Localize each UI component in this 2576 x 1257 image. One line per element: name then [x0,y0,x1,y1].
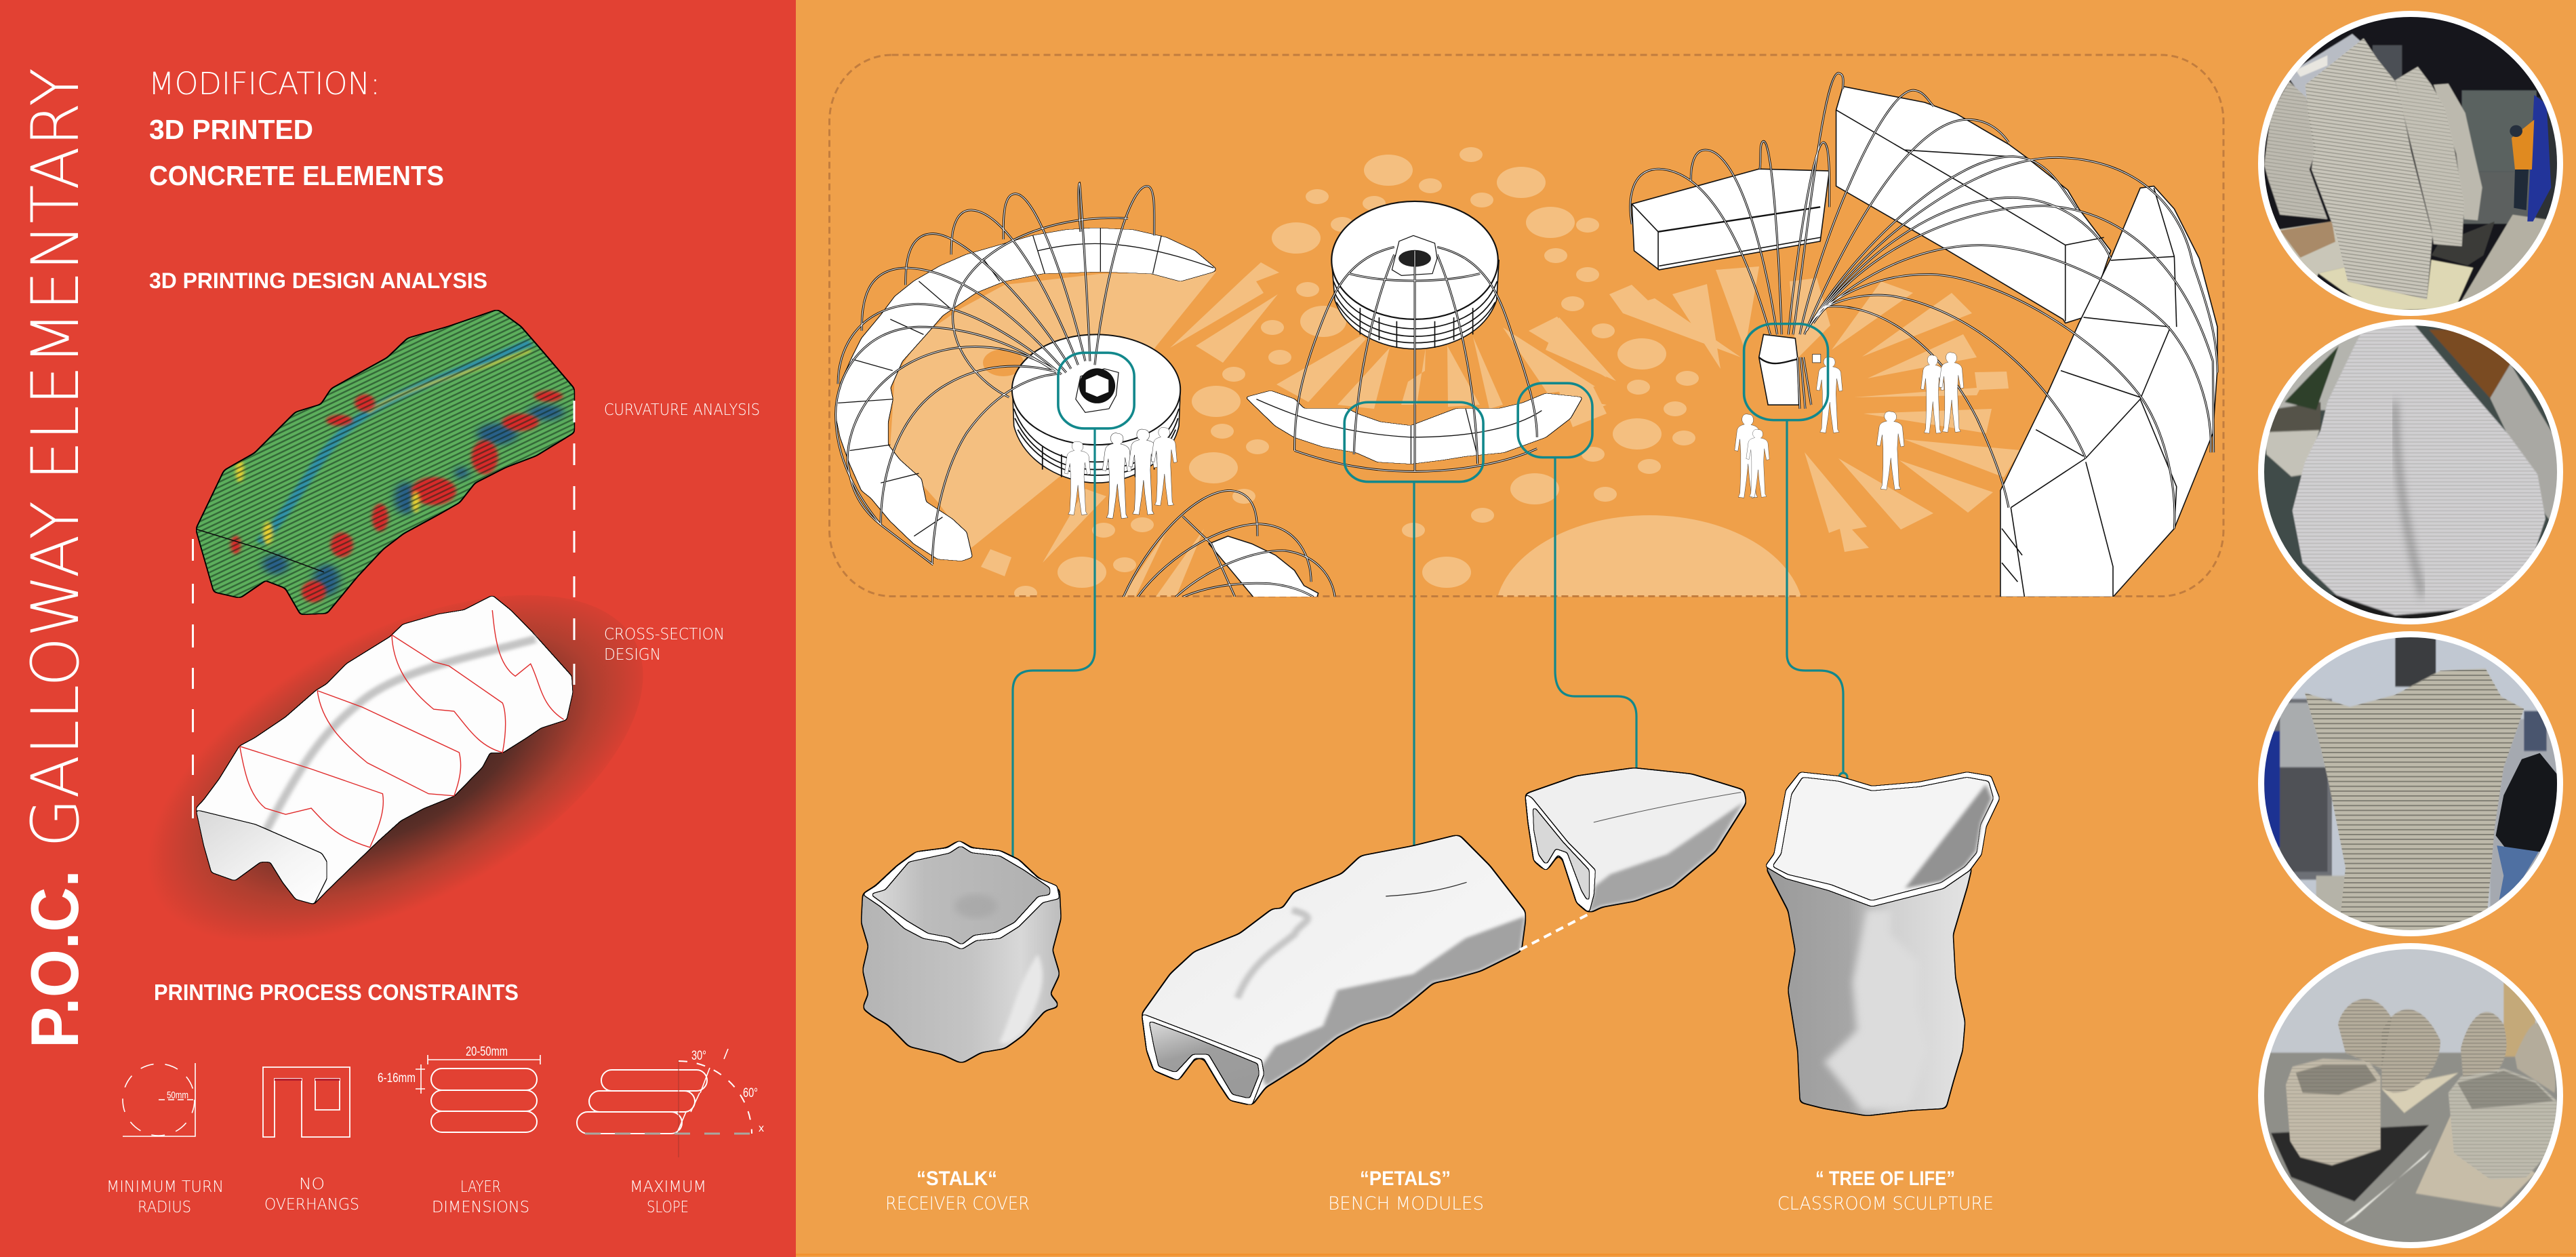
photo: printed stalks and petals [2237,940,2576,1254]
constraint labels: MAXIMUM [630,1178,706,1196]
icon: layer dimensions: 6-16mm [378,1071,416,1085]
photo: tree of life sculpture [2237,626,2576,948]
dashed frame [830,55,2223,597]
heading: printing process constraints: PRINTING PROCESS CONSTRAINTS [154,980,519,1005]
label: cross-section design: DESIGN [604,646,661,664]
icon: maximum slope: x [759,1123,764,1134]
caption: tree of life: “ TREE OF LIFE” [1815,1168,1955,1190]
callout: petals [1344,402,1483,482]
heading: modification: CONCRETE ELEMENTS [149,160,444,191]
icon: minimum turn radius [123,1063,195,1136]
callout: tree [1744,324,1828,420]
icon: no overhangs [263,1067,350,1137]
constraint labels: LAYER [460,1178,501,1196]
constraint labels: OVERHANGS [264,1196,359,1214]
petal ribs [1295,247,1537,471]
icon: maximum slope [577,1049,764,1157]
vertical title: GALLOWAY ELEMENTARY [18,68,94,847]
petals bench [1246,391,1582,464]
structure: tree of life canopy [1518,73,2217,597]
constraint labels: DIMENSIONS [432,1199,529,1216]
disc planter [1012,334,1180,483]
vertical title: P.O.C. [17,870,92,1048]
constraint labels: MINIMUM TURN [106,1178,224,1196]
heading: design analysis: 3D PRINTING DESIGN ANALYSIS [149,268,487,293]
dome planter [1331,201,1499,349]
constraint labels: NO [299,1176,325,1193]
callout: petal end [1518,383,1592,458]
people around tree [1735,353,1964,498]
label: curvature analysis: CURVATURE ANALYSIS [604,401,760,419]
label: cross-section design [604,626,725,664]
leader lines [1009,420,1847,883]
structure: petals bench and dome [1246,201,1582,482]
people group [1064,427,1177,519]
constraint labels: SLOPE [647,1199,689,1216]
object: petals bench module [1142,835,1525,1104]
caption: tree of life: CLASSROOM SCULPTURE [1777,1193,1994,1214]
upper canopy segment [1836,86,2111,323]
caption: tree of life [1777,1168,1994,1214]
heading: modification [148,66,444,191]
tree vase [1759,334,1799,405]
dashed projection lines [193,401,574,818]
caption: stalk: “STALK“ [917,1168,997,1190]
icon: maximum slope: 60° [743,1086,758,1100]
panel: red modification panel [0,0,796,1257]
curvature analysis model [196,310,575,615]
caption: stalk [885,1168,1030,1214]
icon: maximum slope: 30° [691,1049,706,1063]
dashed connector [1520,914,1589,950]
panel: site plan burst pattern [890,147,2019,597]
object: stalk receiver cover [862,841,1060,1063]
structure: lower crescent fragment [1123,490,1335,601]
constraint labels [106,1176,706,1216]
constraint labels: RADIUS [138,1199,191,1216]
structure: stalk crescent [836,183,1216,565]
caption: petals: “PETALS” [1360,1168,1451,1190]
caption: petals [1328,1168,1484,1214]
shadow under cross-section model [77,522,699,1024]
caption: petals: BENCH MODULES [1328,1193,1484,1214]
label: cross-section design: CROSS-SECTION [604,626,725,643]
icon: layer dimensions: 20-50mm [466,1045,508,1059]
orange background [796,0,2576,1257]
crescent bench [836,228,1216,561]
stalk ribs [836,183,1154,565]
tree ribs [1630,73,2217,529]
cross-section design model [197,596,572,904]
bench seams [838,228,1213,536]
icon: layer dimensions [378,1045,540,1132]
caption: stalk: RECEIVER COVER [885,1193,1030,1214]
photo: printed petals in workshop [2257,7,2569,319]
object: petal end cap [1526,768,1746,912]
box bench [1632,169,1829,270]
right canopy segment [2000,186,2217,597]
icon: minimum turn radius: 50mm [167,1090,188,1101]
photo: printed petal close-up [2237,314,2576,635]
object: tree of life sculpture [1766,772,1999,1115]
heading: modification: 3D PRINTED [149,114,313,145]
heading: modification: MODIFICATION: [148,66,380,102]
callout: stalk [1058,353,1134,428]
bottom edge line [796,1254,2576,1256]
